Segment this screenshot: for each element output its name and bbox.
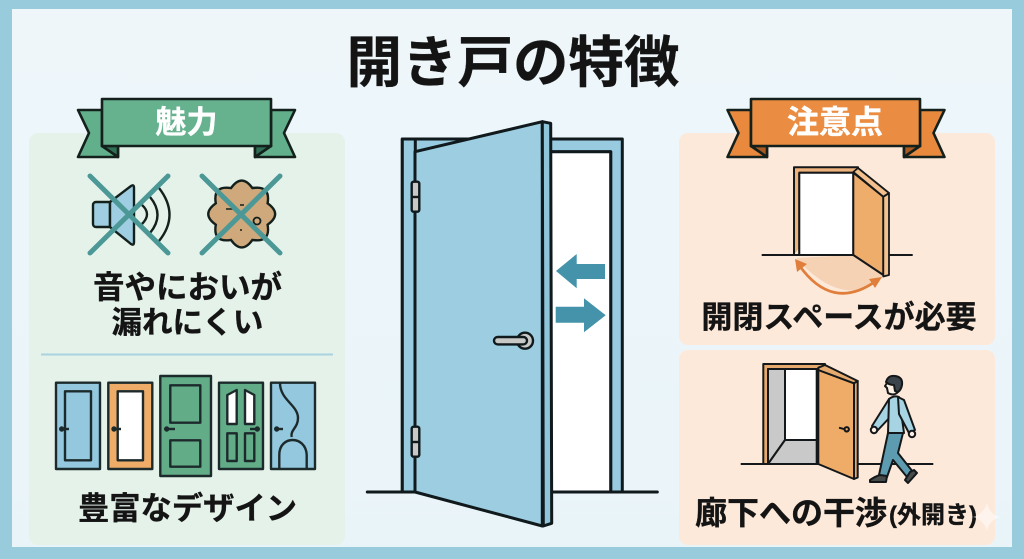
- text: sound and smell: 漏れにくい: [112, 306, 263, 340]
- arrow: left: [556, 254, 605, 288]
- opening: [415, 152, 611, 492]
- door: blue curved: [271, 383, 315, 469]
- text: sound and smell: 音やにおいが: [93, 269, 282, 305]
- arrow: swing arc: [795, 259, 882, 293]
- door: orange: [108, 383, 152, 469]
- illustration: main door: [367, 122, 657, 526]
- front arm: [898, 397, 915, 433]
- title: 開き戸の特徴: [346, 32, 680, 94]
- head: [885, 378, 901, 394]
- icon: door designs: [56, 376, 315, 476]
- back arm: [872, 399, 893, 431]
- text: corridor interference: 廊下への干渉: [695, 495, 887, 531]
- panel: caution corridor: [679, 350, 995, 545]
- shoes: [870, 475, 887, 482]
- torso: [888, 396, 904, 433]
- door frame: [402, 139, 622, 492]
- text: rich designs: 豊富なデザイン: [78, 490, 297, 526]
- hinge top: [412, 182, 419, 212]
- panel: caution space: [679, 99, 995, 345]
- door: green paned: [219, 383, 263, 469]
- text: outward opening: (外開き): [889, 502, 977, 529]
- text: space needed: 開閉スペースが必要: [701, 300, 977, 335]
- ribbon: caution: [728, 99, 944, 157]
- icon: crossed-out speaker: [90, 176, 170, 253]
- icon: door opening space: [762, 167, 913, 293]
- hinge bottom: [412, 427, 419, 457]
- panel: appeal: [29, 99, 345, 545]
- ribbon: appeal: [78, 99, 295, 157]
- floor line: [367, 490, 657, 494]
- legs: [879, 433, 913, 477]
- icon: outward door: [741, 364, 933, 479]
- door handle: [494, 333, 533, 349]
- arrow: right: [556, 298, 606, 332]
- ribbon: caution: 注意点: [787, 104, 883, 140]
- ribbon: appeal: 魅力: [156, 105, 218, 140]
- door edge: [542, 122, 552, 526]
- door leaf: [415, 122, 542, 526]
- icon: crossed-out smell: [202, 176, 280, 253]
- icon: walking person: [870, 376, 917, 483]
- door: green large: [160, 376, 211, 476]
- icon: sparkle: [973, 503, 1000, 531]
- door: blue: [56, 383, 100, 469]
